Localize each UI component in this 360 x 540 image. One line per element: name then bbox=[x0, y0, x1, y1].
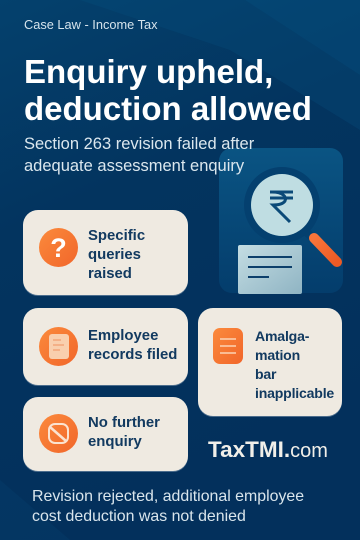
subtitle: Section 263 revision failed after bbox=[24, 135, 254, 153]
subtitle bbox=[24, 135, 254, 175]
icon: blocked enquiry bbox=[39, 414, 78, 453]
icon: question mark bbox=[39, 228, 78, 267]
card: employee records bbox=[23, 308, 188, 385]
card text: Specific bbox=[88, 228, 145, 244]
card: specific queries bbox=[23, 210, 188, 295]
card: amalgamation bar bbox=[198, 308, 342, 416]
card text: Employee bbox=[88, 328, 158, 344]
card text bbox=[88, 228, 145, 282]
icon: list square bbox=[213, 328, 243, 364]
subtitle: adequate assessment enquiry bbox=[24, 157, 244, 175]
card text bbox=[255, 328, 334, 401]
card text: bar bbox=[255, 366, 276, 382]
card text: queries bbox=[88, 247, 141, 263]
title: Enquiry upheld, bbox=[24, 53, 273, 90]
conclusion bbox=[32, 488, 304, 525]
card: no further enquiry bbox=[23, 397, 188, 471]
title bbox=[24, 53, 312, 127]
card text: raised bbox=[88, 266, 132, 282]
conclusion: cost deduction was not denied bbox=[32, 508, 246, 525]
card text: enquiry bbox=[88, 434, 142, 450]
card text: No further bbox=[88, 415, 160, 431]
card text: inapplicable bbox=[255, 385, 334, 401]
conclusion: Revision rejected, additional employee bbox=[32, 488, 304, 505]
card text bbox=[88, 415, 160, 450]
card text: Amalga- bbox=[255, 328, 309, 344]
icon: records sheet bbox=[39, 327, 78, 366]
icon: question mark: ? bbox=[50, 233, 67, 263]
card text: mation bbox=[255, 347, 300, 363]
title: deduction allowed bbox=[24, 90, 312, 127]
card text bbox=[88, 328, 177, 363]
card text: records filed bbox=[88, 347, 177, 363]
eyebrow label: Case Law - Income Tax bbox=[24, 17, 157, 32]
brand: TaxTMI.com bbox=[208, 437, 328, 462]
